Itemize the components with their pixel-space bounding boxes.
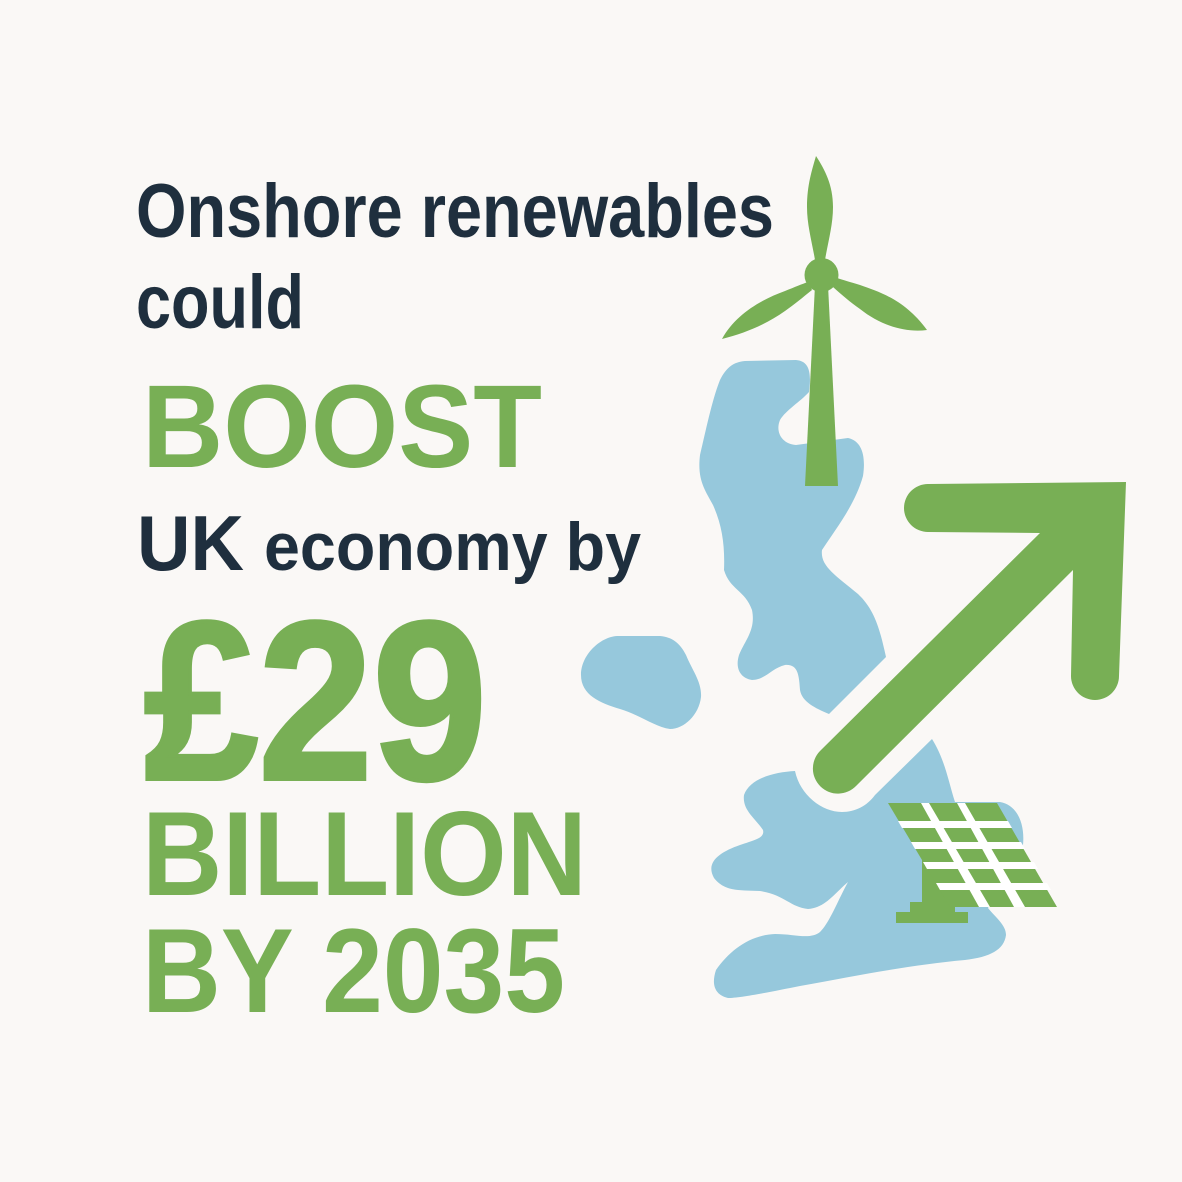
turbine blades — [722, 156, 927, 339]
solar panel surface — [888, 803, 1057, 907]
map: Ireland — [581, 636, 701, 729]
headline: onshore renewables could — [136, 169, 774, 345]
headline: onshore renewables could: Onshore renewables — [136, 169, 774, 254]
icon: wind turbine — [722, 156, 927, 486]
turbine tower — [805, 285, 838, 486]
solar panel grid — [898, 803, 1051, 907]
map of the UK — [581, 360, 1023, 998]
map: southern England and Wales — [711, 739, 1023, 998]
solar panel stand — [896, 860, 968, 923]
headline: onshore renewables could: could — [136, 260, 304, 345]
text: UK economy by — [137, 499, 641, 587]
text: UK economy by: economy by — [264, 509, 641, 585]
text: billion: BILLION — [142, 787, 587, 921]
icon: growth arrow — [813, 482, 1126, 794]
text: by 2035: BY 2035 — [142, 904, 565, 1038]
icon: solar panel — [888, 803, 1057, 923]
figure: £29: £29 — [144, 574, 487, 827]
heading: boost: BOOST — [142, 361, 542, 493]
text: UK economy by: UK — [137, 499, 244, 587]
map: Scotland and northern England — [699, 360, 886, 714]
turbine hub — [804, 258, 838, 292]
